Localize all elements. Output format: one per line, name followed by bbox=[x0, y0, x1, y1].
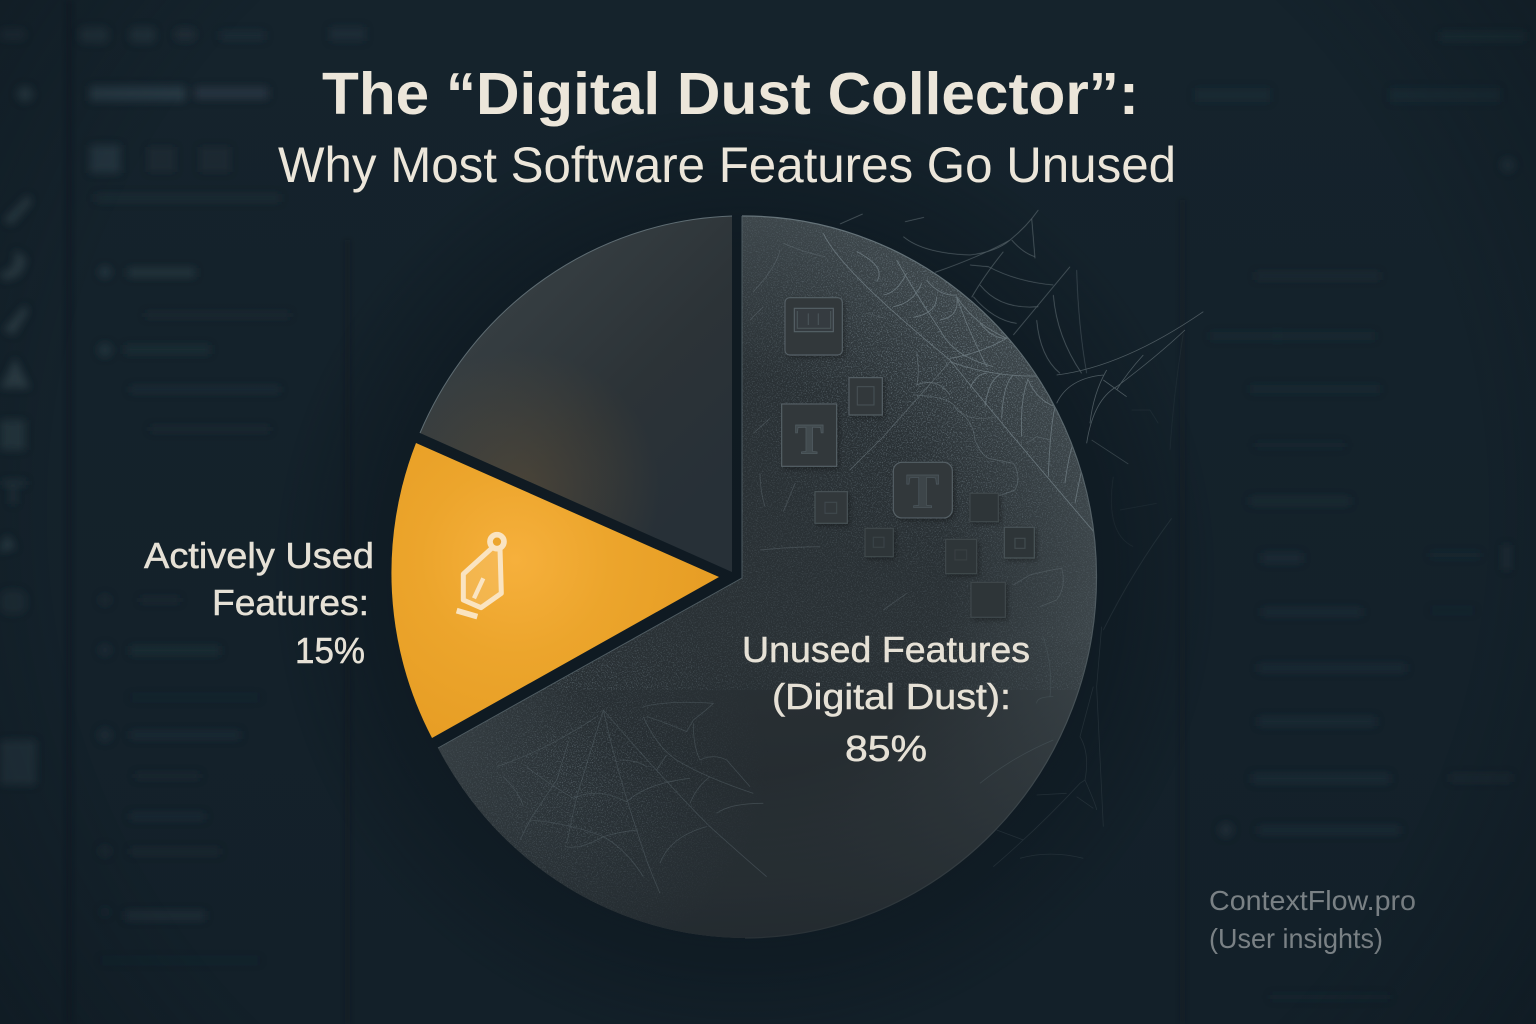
warm glow on gray wedge bbox=[420, 216, 732, 572]
segment: actively used features 15% bbox=[391, 443, 719, 738]
icon: text square: T bbox=[795, 415, 824, 463]
source credit: (User insights) bbox=[1209, 923, 1383, 954]
cobweb on pie: lower left bbox=[497, 702, 767, 893]
title bbox=[278, 61, 1176, 193]
pie edge highlight bbox=[742, 216, 1097, 938]
label: unused features: Unused Features bbox=[742, 629, 1030, 670]
label: unused features: (Digital Dust): bbox=[772, 676, 1011, 717]
label: actively used features: Actively Used bbox=[144, 535, 374, 576]
gray wedge rim bbox=[420, 216, 732, 433]
cobweb on pie: lower right bbox=[980, 637, 1053, 783]
source credit: ContextFlow.pro bbox=[1209, 885, 1416, 916]
shadow around pie bbox=[275, 107, 1215, 1024]
label: actively used features: Features: bbox=[212, 582, 369, 623]
label: unused features: 85% bbox=[845, 728, 927, 769]
icon: small square bbox=[849, 378, 882, 415]
icon: small dotted square bbox=[815, 492, 847, 523]
label: actively used features: 15% bbox=[295, 630, 365, 671]
embossed unused feature icons bbox=[782, 298, 1034, 617]
source credit bbox=[1209, 885, 1416, 954]
cobweb on pie: upper right bbox=[750, 233, 1097, 610]
heading line 2: Why Most Software Features Go Unused bbox=[278, 137, 1176, 193]
heading line 1: The “Digital Dust Collector”: bbox=[322, 61, 1139, 127]
label: actively used features bbox=[144, 535, 374, 671]
segment: unused features 85% bbox=[438, 215, 1098, 938]
segment: unspecified gray wedge bbox=[420, 216, 732, 572]
icon: large window bbox=[785, 298, 842, 355]
icon: pen nib bbox=[457, 535, 504, 617]
icon: rounded text square bbox=[893, 462, 952, 518]
cut edge highlight bbox=[438, 216, 742, 748]
icon: text square bbox=[782, 404, 837, 466]
icon: rounded text square: T bbox=[906, 462, 939, 518]
label: unused features bbox=[742, 629, 1030, 769]
icons: faded squares bbox=[865, 493, 1034, 617]
cobweb behind pie bbox=[840, 210, 1203, 867]
